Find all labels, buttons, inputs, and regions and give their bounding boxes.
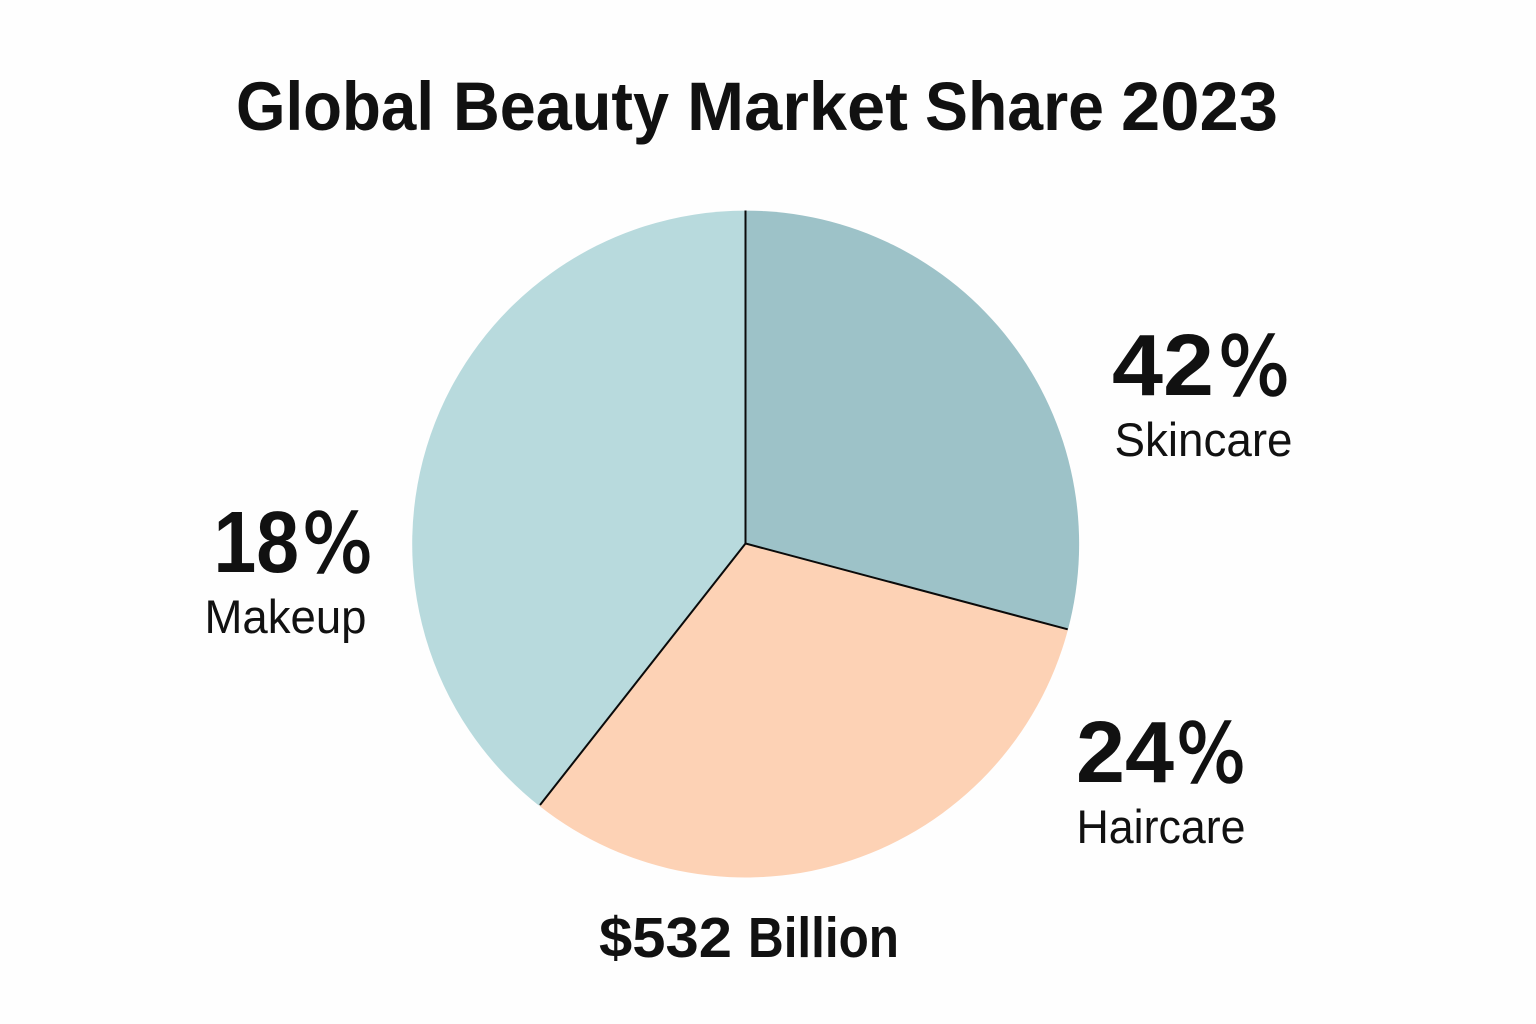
- label: skincare: [1112, 317, 1292, 466]
- slice: haircare: [539, 544, 1068, 877]
- title: Global: [236, 68, 434, 145]
- slice dividers: [540, 210, 1068, 805]
- label: haircare: 24: [1076, 704, 1174, 801]
- label: skincare: Skincare: [1114, 413, 1292, 466]
- label: haircare: %: [1176, 707, 1246, 802]
- label: haircare: [1076, 704, 1246, 853]
- title: Beauty: [453, 68, 669, 145]
- label: haircare: Haircare: [1076, 800, 1246, 853]
- label: skincare: 42: [1112, 317, 1214, 414]
- label: skincare: %: [1218, 320, 1290, 415]
- slice: makeup: [412, 211, 746, 806]
- label: makeup: Makeup: [204, 590, 366, 643]
- pie chart: [412, 210, 1079, 877]
- slice: skincare: [746, 211, 1079, 630]
- total market value: $532: [599, 906, 732, 970]
- title: Share: [925, 68, 1104, 145]
- title: 2023: [1121, 68, 1278, 145]
- total market value: [599, 906, 899, 970]
- label: makeup: 18: [214, 494, 299, 591]
- label: makeup: [204, 494, 373, 643]
- label: makeup: %: [302, 497, 373, 592]
- title: [236, 68, 1278, 145]
- total market value: Billion: [748, 906, 899, 970]
- title: Market: [687, 68, 908, 145]
